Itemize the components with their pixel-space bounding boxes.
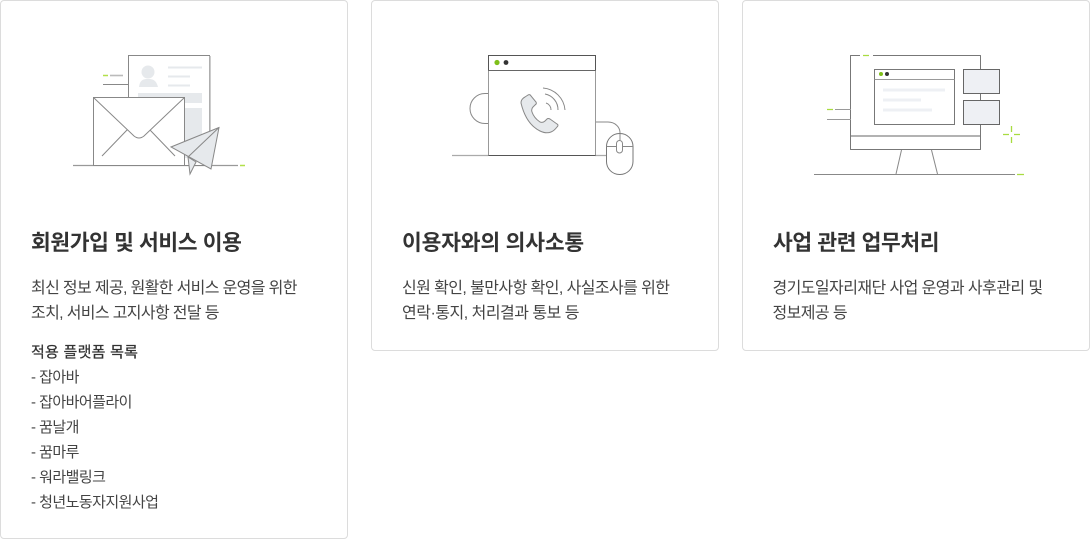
panel: 이용자와의 의사소통 [371, 0, 719, 351]
text block: platform list: - 꿈마루 [31, 444, 79, 461]
panel: 사업 관련 업무처리 [742, 0, 1090, 351]
heading: 이용자와의 의사소통 [402, 231, 584, 255]
panel: 회원가입 및 서비스 이용 [0, 0, 348, 539]
heading: 사업 관련 업무처리 [773, 231, 939, 255]
text block: platform list: - 워라밸링크 [31, 469, 105, 486]
text block: purpose: 연락·통지, 처리결과 통보 등 [402, 305, 579, 322]
text block: platform list: - 잡아바어플라이 [31, 394, 132, 411]
icon: browser window with phone and mouse [452, 55, 634, 175]
text block: purpose: 최신 정보 제공, 원활한 서비스 운영을 위한 [31, 280, 297, 297]
icon: desktop monitor with windows [814, 54, 1024, 176]
text block: platform list [31, 344, 158, 511]
heading: 회원가입 및 서비스 이용 [31, 231, 242, 255]
text block: purpose [402, 280, 670, 322]
text block: platform list: - 청년노동자지원사업 [31, 494, 158, 511]
text block: platform list: - 잡아바 [31, 369, 79, 386]
text block: platform list: - 꿈날개 [31, 419, 79, 436]
text block: purpose [31, 279, 297, 322]
text block: purpose [772, 280, 1042, 322]
text block: platform list: 적용 플랫폼 목록 [31, 344, 138, 361]
text block: purpose: 정보제공 등 [772, 305, 847, 322]
text block: purpose: 조치, 서비스 고지사항 전달 등 [31, 305, 219, 322]
text block: purpose: 경기도일자리재단 사업 운영과 사후관리 및 [772, 280, 1042, 297]
text block: purpose: 신원 확인, 불만사항 확인, 사실조사를 위한 [402, 280, 669, 297]
icon: envelope, document and paper plane [73, 55, 245, 176]
